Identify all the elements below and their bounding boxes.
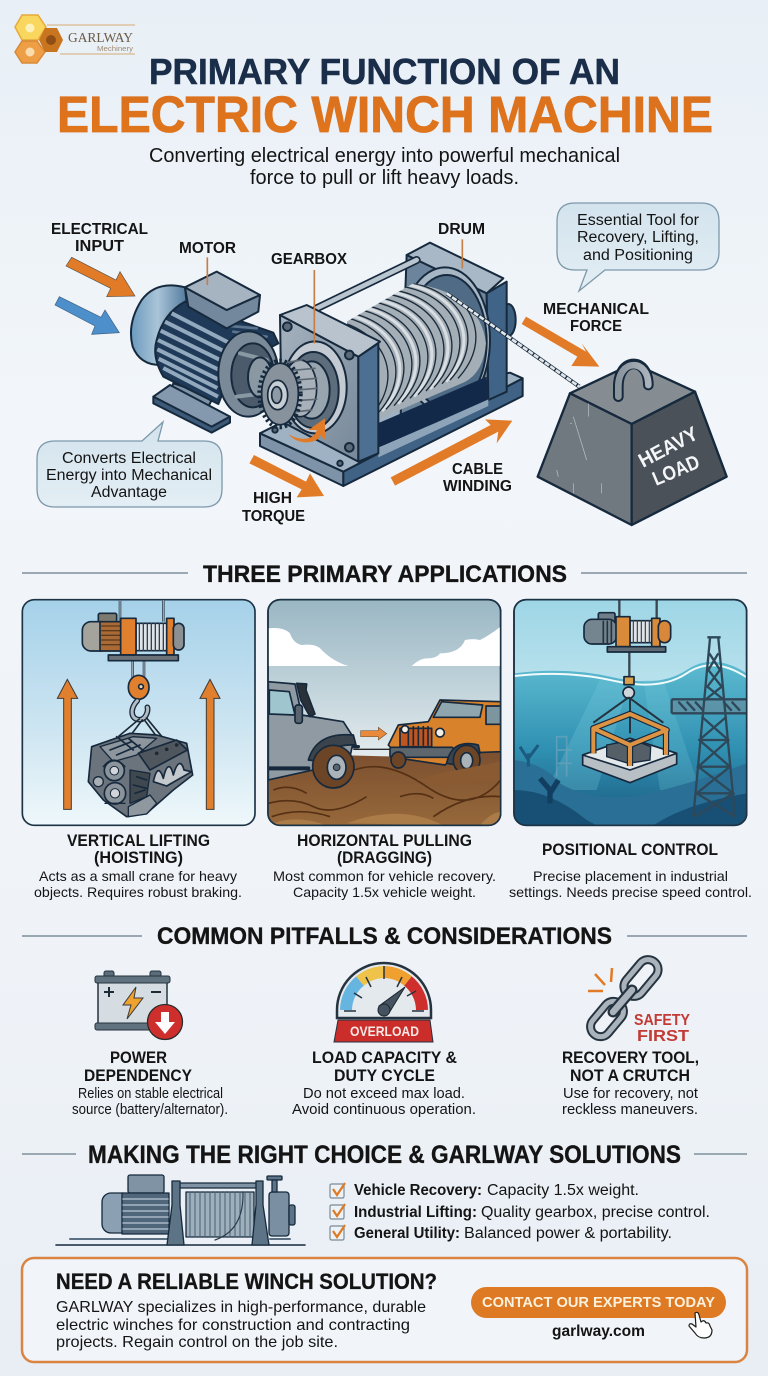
arrow: mechanical force [522, 317, 599, 367]
hero labels: INPUT [75, 238, 124, 255]
icon: hand cursor [689, 1312, 712, 1338]
heading: common pitfalls: COMMON PITFALLS & CONSIDERATIONS [157, 923, 612, 950]
icon: chain safety first: FIRST [637, 1028, 689, 1045]
callout: converts energy: Energy into Mechanical [46, 467, 212, 484]
callout: converts energy: Converts Electrical [62, 450, 196, 467]
logo: GARLWAY [68, 31, 133, 46]
hero labels: ELECTRICAL [51, 221, 148, 238]
arrow: electrical input orange [66, 257, 135, 297]
caption: horizontal pulling: Most common for vehicle recovery. [273, 868, 496, 884]
caption: power dependency: POWER [110, 1049, 167, 1067]
icon: chain safety first: SAFETY [634, 1012, 690, 1029]
caption: recovery tool: RECOVERY TOOL, [562, 1049, 699, 1067]
subtitle: force to pull or lift heavy loads. [250, 167, 519, 189]
caption: vertical lifting: VERTICAL LIFTING [67, 832, 210, 850]
item: general utility [330, 1225, 672, 1242]
caption: power dependency: source (battery/alternator). [72, 1101, 228, 1118]
caption: power dependency: DEPENDENCY [84, 1067, 192, 1085]
checklist [330, 1182, 710, 1242]
illustration: garlway winch [56, 1175, 305, 1245]
hero winch diagram [37, 203, 727, 525]
callout: essential tool: Recovery, Lifting, [577, 229, 699, 246]
heading: three primary applications: THREE PRIMARY APPLICATIONS [203, 561, 567, 588]
caption: recovery tool: Use for recovery, not [563, 1085, 699, 1102]
item: general utility: Balanced power & portability. [464, 1225, 672, 1242]
panel: call to action [22, 1258, 747, 1362]
cta body: projects. Regain control on the job site. [56, 1334, 338, 1351]
item: industrial lifting: Industrial Lifting: [354, 1204, 477, 1221]
pitfall: load capacity [292, 963, 476, 1118]
hero labels: CABLE [452, 461, 503, 478]
title: PRIMARY FUNCTION OF AN [149, 51, 620, 92]
caption: positional control: settings. Needs precise speed control. [509, 884, 752, 900]
arrow: high torque [249, 455, 324, 497]
motor [131, 272, 278, 433]
machine illustration [55, 239, 599, 497]
wire cable [447, 293, 579, 387]
cta button [471, 1287, 726, 1318]
base plate [260, 373, 523, 486]
caption: recovery tool [562, 1049, 699, 1118]
caption: load capacity: Avoid continuous operation. [292, 1101, 476, 1118]
engine [88, 733, 193, 817]
title: ELECTRIC WINCH MACHINE [57, 86, 713, 143]
panel: horizontal pulling [268, 600, 501, 900]
item: vehicle recovery [330, 1182, 639, 1199]
icon: overload gauge: OVERLOAD [350, 1023, 419, 1039]
leader lines [207, 239, 462, 343]
icon: chain safety first [586, 955, 690, 1045]
caption: horizontal pulling: HORIZONTAL PULLING [297, 832, 472, 850]
caption: recovery tool: NOT A CRUTCH [570, 1067, 690, 1085]
item: general utility: General Utility: [354, 1225, 460, 1242]
right drum plate [370, 243, 516, 457]
website: garlway.com [552, 1323, 645, 1340]
hero labels [51, 221, 649, 525]
caption: load capacity [292, 1049, 476, 1118]
gearbox plate [272, 305, 380, 466]
caption: vertical lifting: (HOISTING) [94, 849, 183, 867]
heading: making the right choice: MAKING THE RIGHT CHOICE & GARLWAY SOLUTIONS [88, 1141, 681, 1169]
arrow: cable winding [391, 419, 512, 486]
hero labels: DRUM [438, 221, 485, 238]
illustration: vehicle recovery [268, 600, 501, 825]
heavy load weight [538, 363, 727, 525]
cta button: CONTACT OUR EXPERTS TODAY [482, 1294, 715, 1311]
illustration: underwater placement [514, 600, 747, 825]
arrow: electrical input blue [55, 297, 119, 334]
item: industrial lifting [330, 1204, 710, 1221]
item: vehicle recovery: Capacity 1.5x weight. [487, 1182, 639, 1199]
caption: power dependency: Relies on stable electrical [78, 1085, 223, 1102]
caption: positional control: Precise placement in industrial [533, 868, 728, 884]
caption: vertical lifting: Acts as a small crane for heavy [39, 868, 237, 884]
cta heading: NEED A RELIABLE WINCH SOLUTION? [56, 1269, 437, 1294]
subtitle: Converting electrical energy into powerful mechanical [149, 145, 620, 167]
item: vehicle recovery: Vehicle Recovery: [354, 1182, 482, 1199]
caption: positional control: POSITIONAL CONTROL [542, 841, 718, 859]
title [57, 51, 713, 143]
caption: vertical lifting: objects. Requires robust braking. [34, 884, 242, 900]
callout: essential tool [557, 203, 719, 291]
heavy load weight: LOAD [649, 451, 703, 491]
icon: overload gauge [334, 963, 433, 1042]
subtitle [149, 145, 620, 189]
pitfall: power dependency [72, 971, 228, 1118]
logo: Mechinery [97, 46, 134, 53]
callout: converts energy: Advantage [91, 484, 167, 501]
caption: load capacity: DUTY CYCLE [334, 1067, 435, 1085]
icon: torque curved arrow [288, 418, 325, 442]
caption: recovery tool: reckless maneuvers. [562, 1101, 698, 1118]
caption: load capacity: LOAD CAPACITY & [312, 1049, 457, 1067]
drive gear [260, 360, 317, 427]
hero labels: MECHANICAL [543, 301, 649, 318]
icon: battery with warning [95, 971, 182, 1040]
hero labels: WINDING [443, 478, 512, 495]
hero labels: GEARBOX [271, 251, 347, 268]
panel: vertical lifting [22, 600, 255, 900]
pitfall: recovery tool [562, 955, 699, 1118]
illustration: hoist and engine [22, 600, 255, 825]
caption: positional control [509, 841, 752, 900]
logo [15, 15, 135, 63]
callout: converts energy [37, 422, 222, 507]
caption: vertical lifting [34, 832, 242, 900]
caption: horizontal pulling [273, 832, 496, 900]
caption: horizontal pulling: (DRAGGING) [337, 849, 432, 867]
callout: essential tool: Essential Tool for [577, 212, 699, 229]
top tie rod [317, 260, 417, 308]
caption: power dependency [72, 1049, 228, 1118]
hero labels: FORCE [570, 318, 622, 335]
hero labels: MOTOR [179, 240, 236, 257]
rope drum [346, 284, 486, 418]
callout: essential tool: and Positioning [583, 247, 693, 264]
heavy load weight: HEAVY [635, 423, 702, 472]
panel: positional control [509, 600, 752, 900]
item: industrial lifting: Quality gearbox, precise control. [481, 1204, 710, 1221]
caption: horizontal pulling: Capacity 1.5x vehicle weight. [293, 884, 476, 900]
hero labels: HIGH [253, 490, 292, 507]
caption: load capacity: Do not exceed max load. [303, 1085, 465, 1102]
hero labels: TORQUE [242, 508, 305, 525]
cta body: electric winches for construction and contracting [56, 1317, 410, 1334]
cta body: GARLWAY specializes in high-performance, durable [56, 1299, 426, 1316]
cta body [56, 1299, 426, 1351]
